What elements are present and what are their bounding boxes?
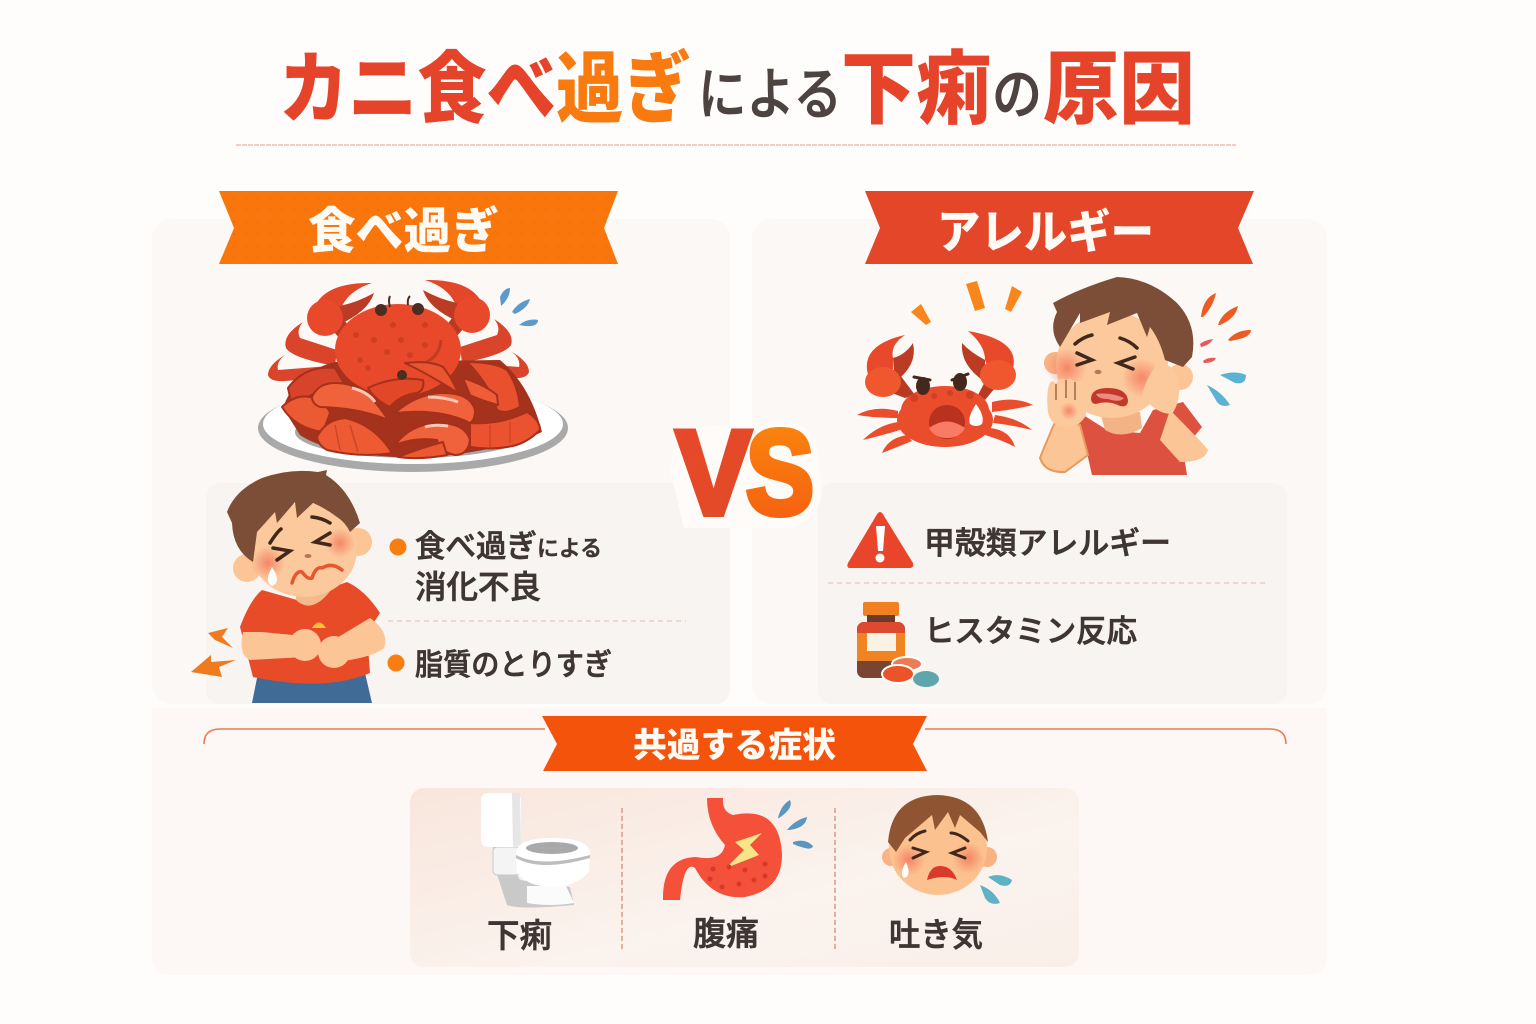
- banner: allergy: [865, 191, 1254, 264]
- banner: allergy: アレルギー: [937, 206, 1154, 258]
- panel: allergy: [752, 219, 1327, 704]
- title: 原因: [1043, 45, 1195, 134]
- label: diarrhea: 下痢: [487, 917, 552, 954]
- VS mark: [670, 406, 822, 540]
- panel: overeating causes box: [206, 483, 730, 704]
- banner: overeating: 食べ過ぎ: [308, 204, 499, 259]
- panel: symptoms: [410, 788, 1079, 967]
- title: カニ食べ: [279, 45, 556, 133]
- callout: overeating causes: による: [537, 536, 602, 561]
- title: [279, 45, 1195, 134]
- icon: toilet: [481, 793, 590, 908]
- title: の: [992, 63, 1042, 126]
- panel: shared background: [152, 708, 1327, 975]
- VS mark: S: [746, 406, 814, 540]
- title: 下痢: [841, 45, 991, 134]
- label: nausea: 吐き気: [889, 916, 983, 953]
- panel: allergy causes box: [818, 483, 1287, 704]
- callout: allergy causes: 甲殻類アレルギー: [924, 526, 1171, 561]
- banner: common symptoms: [542, 716, 927, 771]
- banner: overeating: [219, 191, 618, 264]
- icon: surprised crab: [857, 281, 1033, 453]
- icon: stomach with pain: [663, 798, 813, 900]
- icon: plate of crabs: [258, 280, 568, 472]
- panel: overeating: [152, 219, 730, 704]
- callout: overeating causes: 消化不良: [415, 569, 541, 605]
- icon: nauseous face: [882, 795, 1012, 904]
- title: による: [698, 63, 842, 126]
- callout: allergy causes: [828, 512, 1265, 687]
- callout: overeating causes: 脂質のとりすぎ: [415, 649, 612, 682]
- callout: overeating causes: 食べ過ぎ: [415, 529, 537, 564]
- icon: boy with allergic reaction: [1040, 277, 1251, 475]
- callout: allergy causes: ヒスタミン反応: [924, 614, 1137, 649]
- VS mark: V: [676, 406, 751, 540]
- icon: boy with stomach ache: [191, 470, 385, 703]
- callout: overeating causes: [388, 529, 686, 682]
- banner: common symptoms: 共過する症状: [633, 727, 836, 765]
- common symptoms bracket line: [204, 729, 1286, 744]
- title: 過ぎ: [556, 45, 691, 133]
- label: abdominal pain: 腹痛: [693, 915, 759, 952]
